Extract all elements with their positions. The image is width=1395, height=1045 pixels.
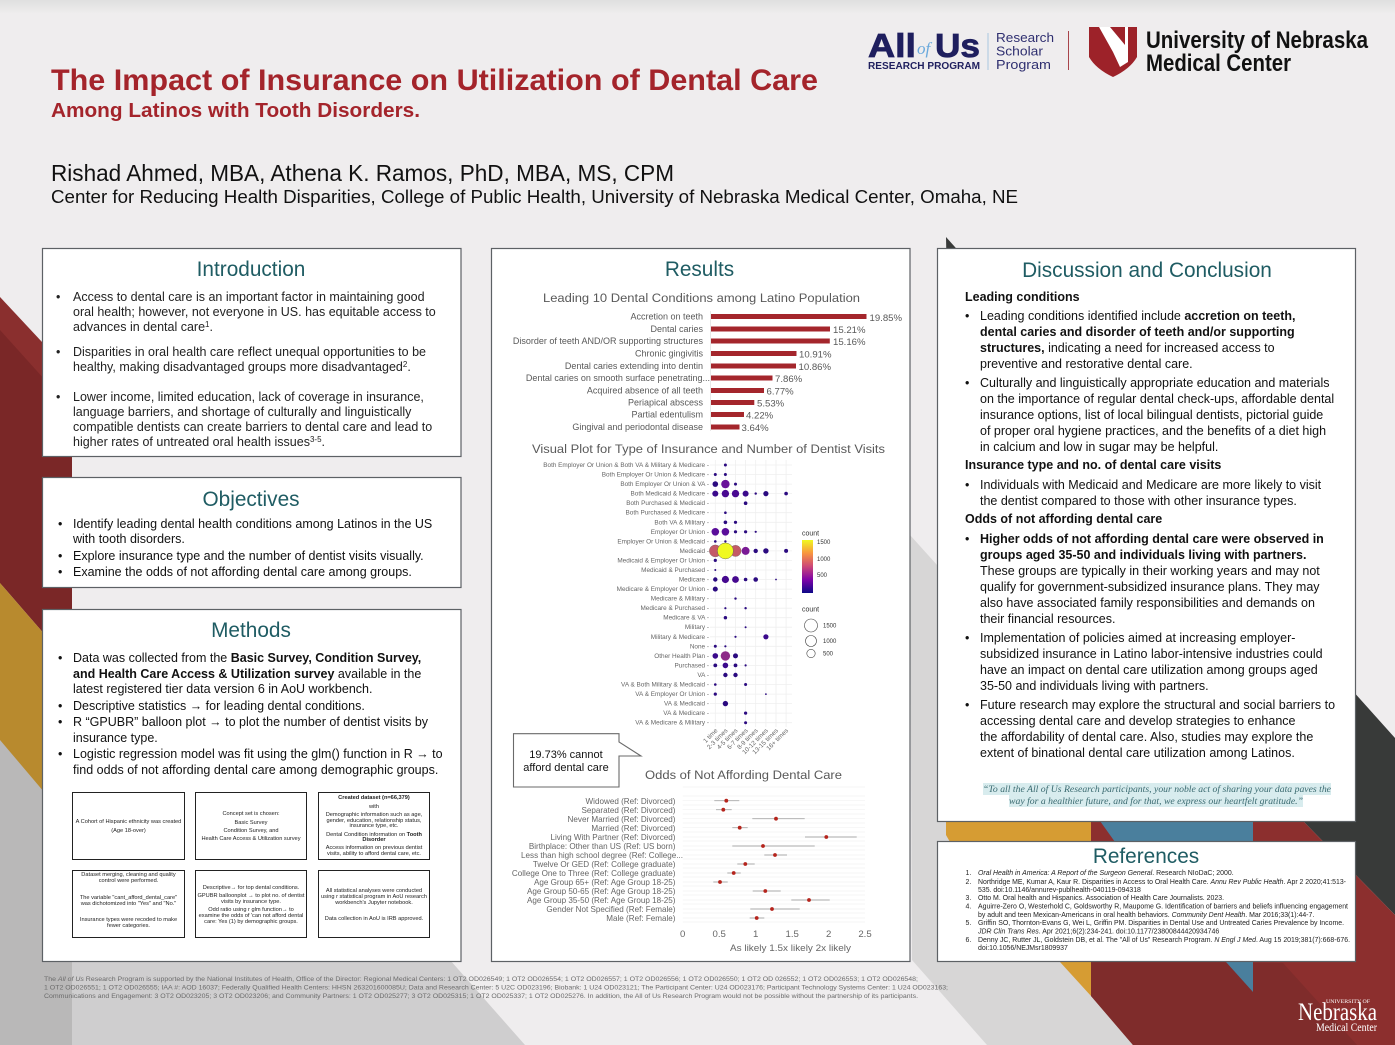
introduction text: . xyxy=(407,360,411,374)
flow box: analysis: Descriptive→ for top dental conditions. xyxy=(203,885,300,891)
discussion text: of proper oral hygiene practices, and the benefits of a diet high xyxy=(980,424,1326,438)
bar chart: leading dental conditions: 6.77% xyxy=(766,386,794,398)
introduction text: • xyxy=(56,290,60,304)
legend: size scale: count xyxy=(802,606,819,614)
discussion text: in calcium and low in sugar may be helpful. xyxy=(980,440,1218,454)
title: The Impact of Insurance on Utilization of Dental Care xyxy=(51,64,818,97)
acknowledgement quote xyxy=(983,783,1331,807)
introduction text: 2 xyxy=(403,360,408,369)
flow box: concept set: Basic Survey xyxy=(235,820,268,826)
methods text: R “GPUBR” balloon plot → to plot the number of dentist visits by xyxy=(73,715,429,729)
acknowledgement quote: “To all the All of Us Research participants, your noble act of sharing your data paves the xyxy=(983,784,1331,795)
flow box: created dataset: Created dataset (n=66,379) xyxy=(338,795,410,801)
reference list: 535. doi:10.1146/annurev-publhealth-040119-094318 xyxy=(978,887,1141,894)
flow box: statistical program: All statistical analyses were conducted xyxy=(326,888,422,894)
introduction text: Disparities in oral health care reflect unequal opportunities to be xyxy=(73,345,426,359)
balloon plot: insurance type by dentist visits xyxy=(543,460,792,756)
flow box: concept set: Health Care Access & Utilization survey xyxy=(201,836,301,842)
balloon plot: insurance type by dentist visits: Purchased - xyxy=(675,662,709,669)
methods text: find odds of not affording dental care among demographic groups. xyxy=(73,763,438,777)
bar chart: leading dental conditions: 10.86% xyxy=(798,362,832,373)
discussion text: on the importance of regular dental check-ups, affordable dental xyxy=(980,392,1334,406)
heading: introduction: Introduction xyxy=(197,258,305,281)
discussion text xyxy=(965,290,1335,760)
funding acknowledgement: 1 OT2 OD026551; 1 OT2 OD026555; IAA #: AOD 16037; Federally Qualified Health Centers: HHSN 263201600085U; Data and Research Center: 5 U2C OD023196; Biobank: 1 U24 OD023121; The Participant Center: U24 OD023176; Participant Technology Systems Center: 1 U24 OD023163; xyxy=(44,984,948,992)
flow box: created dataset: with xyxy=(368,804,379,810)
reference list: 3. xyxy=(966,895,971,902)
bar chart: leading dental conditions: Periapical abscess xyxy=(628,398,703,408)
panel: introduction xyxy=(42,248,461,456)
forest plot: odds of not affording dental care: Never Married (Ref: Divorced) xyxy=(568,815,676,824)
logo text: Research Scholar Program: Research xyxy=(996,30,1054,45)
discussion text: • xyxy=(965,309,969,323)
flow box: merging and cleaning: Dataset merging, cleaning and quality xyxy=(81,872,176,878)
logo: All of Us: Us xyxy=(935,27,980,64)
heading: methods: Methods xyxy=(211,619,291,642)
discussion text: also have associated family responsibilities and demands on xyxy=(980,596,1315,610)
flow box: analysis xyxy=(196,870,306,938)
heading: objectives: Objectives xyxy=(202,488,300,511)
flow box: created dataset: visits, ability to afford dental care, etc. xyxy=(327,851,421,857)
introduction text: 3-5 xyxy=(310,435,322,444)
balloon plot: insurance type by dentist visits: Military & Medicare - xyxy=(651,634,709,641)
bar chart: leading dental conditions: Acquired absence of all teeth xyxy=(587,386,703,396)
forest plot: odds of not affording dental care: 1.5 xyxy=(786,929,799,940)
flow box: statistical program xyxy=(318,870,430,938)
reference list: 2. xyxy=(966,879,971,886)
flow box: merging and cleaning: control were performed. xyxy=(99,878,159,884)
discussion text: Culturally and linguistically appropriate education and materials xyxy=(980,376,1330,390)
panel: references xyxy=(938,842,1356,962)
bar chart: leading dental conditions: Accretion on teeth xyxy=(630,312,703,322)
discussion text: structures, indicating a need for increased access to xyxy=(980,341,1275,355)
flow box: cohort: A Cohort of Hispanic ethnicity was created xyxy=(76,819,181,825)
forest plot: odds of not affording dental care: 0 xyxy=(680,929,685,940)
forest plot: odds of not affording dental care: Age Group 50-65 (Ref: Age Group 18-25) xyxy=(527,887,676,896)
forest plot: odds of not affording dental care: Married (Ref: Divorced) xyxy=(591,824,676,833)
bar chart: leading dental conditions: 5.53% xyxy=(757,398,785,410)
balloon plot: insurance type by dentist visits: 8-9 times xyxy=(736,727,760,751)
bar chart: leading dental conditions: 4.22% xyxy=(746,410,774,422)
balloon plot: insurance type by dentist visits: Both Employer Or Union & VA - xyxy=(620,481,709,488)
reference list: 1. xyxy=(966,870,971,877)
discussion text: Future research may explore the structural and social barriers to xyxy=(980,698,1335,712)
discussion text: • xyxy=(965,478,969,492)
balloon plot: insurance type by dentist visits: Both Purchased & Medicaid - xyxy=(626,500,709,507)
introduction text: . xyxy=(322,435,325,449)
forest plot: odds of not affording dental care: Living With Partner (Ref: Divorced) xyxy=(550,833,676,842)
header logos xyxy=(868,27,1369,77)
introduction text xyxy=(56,290,436,449)
discussion text: dental caries and disorder of teeth and/or supporting xyxy=(980,325,1295,339)
bar chart: leading dental conditions: 7.86% xyxy=(775,374,803,385)
introduction text: • xyxy=(56,390,60,404)
introduction text: . xyxy=(209,320,213,334)
balloon plot: insurance type by dentist visits: 13-15 times xyxy=(751,727,780,756)
forest plot: odds of not affording dental care: College One to Three (Ref: College graduate) xyxy=(512,869,676,878)
discussion text: Individuals with Medicaid and Medicare are more likely to visit xyxy=(980,478,1322,492)
authors: Rishad Ahmed, MBA, Athena K. Ramos, PhD, MBA, MS, CPM xyxy=(51,160,674,186)
flow box: cohort xyxy=(72,792,184,860)
logo: Nebraska Medical Center xyxy=(1298,999,1377,1034)
balloon plot: insurance type by dentist visits: Both Employer Or Union & Both VA & Military & Medicare - xyxy=(543,462,709,469)
legend: colour scale xyxy=(802,530,831,593)
reference list: by adult and teen Mexican-Americans in oral health behaviors. Community Dent Health. Mar 2016;33(1):44-7. xyxy=(978,912,1314,919)
logo: All of Us: All xyxy=(868,27,916,64)
objectives text: with tooth disorders. xyxy=(72,532,185,546)
logo text: Research Scholar Program xyxy=(996,30,1054,72)
flow box: analysis: visits by insurance type. xyxy=(221,899,281,905)
forest plot: odds of not affording dental care: Widowed (Ref: Divorced) xyxy=(586,797,676,806)
discussion text: 35-50 and individuals living with partners. xyxy=(980,679,1209,693)
discussion text: the dentist compared to those with other insurance types. xyxy=(980,494,1297,508)
flow box: statistical program: using r statistical program in AoU research xyxy=(321,894,427,900)
objectives text: • xyxy=(58,549,62,563)
balloon plot: insurance type by dentist visits: Medicare & Employer Or Union - xyxy=(617,586,709,593)
discussion text: subsidized insurance in Latino labor-intensive industries could xyxy=(980,647,1323,661)
reference list: JDR Clin Trans Res. Apr 2021;6(2):234-241. doi:10.1177/23800844420934746 xyxy=(977,928,1219,936)
forest plot: odds of not affording dental care: 2.5 xyxy=(858,929,872,940)
balloon plot: insurance type by dentist visits: VA & Medicare & Military - xyxy=(635,720,709,727)
methods text: Logistic regression model was fit using the glm() function in R → to xyxy=(73,747,443,761)
methods text: Descriptive statistics → for leading dental conditions. xyxy=(73,699,365,713)
methods text: and Health Care Access & Utilization survey available in the xyxy=(73,667,421,681)
panel: discussion and conclusion xyxy=(938,248,1356,822)
flow box: created dataset: insurance type, etc. xyxy=(350,823,399,829)
forest plot: odds of not affording dental care: Gender Not Specified (Ref: Female) xyxy=(546,905,676,914)
discussion text: • xyxy=(965,631,969,645)
forest plot: odds of not affording dental care: Male (Ref: Female) xyxy=(606,914,676,923)
flow box: cohort: (Age 18-over) xyxy=(111,828,146,834)
methods text: insurance type. xyxy=(73,731,158,745)
discussion text: their financial resources. xyxy=(980,612,1115,626)
balloon plot: insurance type by dentist visits: 16+ times xyxy=(765,727,790,752)
panel: methods xyxy=(42,610,461,962)
introduction text: • xyxy=(56,345,60,359)
balloon plot: insurance type by dentist visits: VA & Medicaid - xyxy=(664,701,709,708)
forest plot: odds of not affording dental care: Age Group 35-50 (Ref: Age Group 18-25) xyxy=(527,896,676,905)
panel: results xyxy=(492,248,910,962)
forest plot: odds of not affording dental care: Age Group 65+ (Ref: Age Group 18-25) xyxy=(534,878,676,887)
discussion text: groups aged 35-50 and individuals living with partners. xyxy=(980,548,1306,562)
reference list: Oral Health in America: A Report of the Surgeon General. Research NIoDaC; 2000. xyxy=(978,870,1234,877)
discussion text: Insurance type and no. of dental care visits xyxy=(965,458,1221,472)
forest plot: odds of not affording dental care: 2 xyxy=(826,929,831,940)
chart title: odds: Odds of Not Affording Dental Care xyxy=(645,768,842,782)
discussion text: • xyxy=(965,698,969,712)
flow box: created dataset: Dental Condition information on Tooth xyxy=(326,832,422,838)
legend: colour scale: count xyxy=(802,530,819,538)
discussion text: extent of binational dental care utilization among Latinos. xyxy=(980,746,1295,760)
bar chart: leading dental conditions: 19.85% xyxy=(870,313,903,324)
flow box: merging and cleaning xyxy=(72,870,184,938)
logo: Nebraska Medical Center: UNIVERSITY OF xyxy=(1326,1000,1370,1005)
discussion text: Higher odds of not affording dental care were observed in xyxy=(980,532,1324,546)
balloon plot: insurance type by dentist visits: Both Medicaid & Medicare - xyxy=(630,491,709,498)
heading: discussion and conclusion: Discussion and Conclusion xyxy=(1022,259,1272,282)
discussion text: accessing dental care and develop strategies to enhance xyxy=(980,714,1296,728)
objectives text: Explore insurance type and the number of dentist visits visually. xyxy=(73,549,424,563)
bar chart: leading dental conditions: Chronic gingivitis xyxy=(635,348,703,358)
discussion text: insurance options, list of local bilingual dentists, pictorial guide xyxy=(980,408,1323,422)
methods text: • xyxy=(58,747,62,761)
bar chart: leading dental conditions: Gingival and periodontal disease xyxy=(572,422,703,432)
bar chart: leading dental conditions: 15.21% xyxy=(833,325,866,336)
legend: colour scale: 500 xyxy=(817,573,828,579)
forest plot: odds of not affording dental care: Separated (Ref: Divorced) xyxy=(581,806,676,815)
forest plot: odds of not affording dental care: Birthplace: Other than US (Ref: US born) xyxy=(529,842,676,851)
legend: size scale: 1500 xyxy=(823,624,837,630)
flow box: created dataset: gender, education, relationship status, xyxy=(326,818,422,824)
balloon plot: insurance type by dentist visits: Medicare & VA - xyxy=(663,615,709,622)
flow box: analysis: Odd ratio using r glm function→ to xyxy=(208,907,294,913)
forest plot: odds of not affording dental care: 1 xyxy=(753,929,758,940)
balloon plot: insurance type by dentist visits: Employer Or Union & Medicaid - xyxy=(617,538,709,545)
methods text: • xyxy=(58,699,62,713)
flow box: analysis: care: Yes (1) by demographic groups. xyxy=(204,919,298,925)
introduction text: advances in dental care xyxy=(73,320,205,334)
flow box: created dataset: Demographic information such as age, xyxy=(326,812,423,818)
flow box: statistical program: workbench's Jupyter notebook. xyxy=(334,900,413,906)
heading: results: Results xyxy=(665,258,734,281)
introduction text: language barriers, and shortage of culturally and linguistically xyxy=(73,405,412,419)
flow box: merging and cleaning: fewer categories. xyxy=(107,923,150,929)
objectives text: Examine the odds of not affording dental care among groups. xyxy=(73,565,412,579)
flow box: merging and cleaning: The variable "cant_afford_dental_care" xyxy=(80,895,177,901)
balloon plot: insurance type by dentist visits: 10-12 times xyxy=(741,727,770,756)
discussion text: have an impact on dental care utilization among groups aged xyxy=(980,663,1318,677)
balloon plot: insurance type by dentist visits: 2-3 times xyxy=(706,727,729,751)
discussion text: Leading conditions identified include accretion on teeth, xyxy=(980,309,1295,323)
introduction text: 1 xyxy=(205,320,210,329)
introduction text: oral health; however, not everyone in US. has equitable access to xyxy=(73,305,436,319)
reference list: 6. xyxy=(966,937,971,944)
balloon plot: insurance type by dentist visits: Both Employer Or Union & Medicare - xyxy=(602,472,709,478)
funding acknowledgement: Communications and Engagement: 3 OT2 OD023205; 3 OT2 OD023206; and Community Partners: 1 OT2 OD025277; 3 OT2 OD025315; 1 OT2 OD025337; 1 OT2 OD025276. In addition, the All of Us Research Program would not be possible without the partnership of its participants. xyxy=(44,993,918,1000)
affiliation: Center for Reducing Health Disparities, College of Public Health, University of Nebraska Medical Center, Omaha, NE xyxy=(51,186,1018,207)
balloon plot: insurance type by dentist visits: Medicare & Military - xyxy=(651,596,709,603)
subtitle: Among Latinos with Tooth Disorders. xyxy=(51,99,420,122)
discussion text: These groups are typically in their working years and may not xyxy=(980,564,1320,578)
logo text: University of Nebraska Medical Center: Medical Center xyxy=(1146,50,1291,77)
legend: colour scale: 1000 xyxy=(817,557,831,563)
bar chart: leading dental conditions: Partial edentulism xyxy=(631,410,703,420)
logo: Nebraska Medical Center: Nebraska xyxy=(1298,999,1377,1026)
balloon plot: insurance type by dentist visits: 1 time xyxy=(702,727,720,745)
discussion text: qualify for government-subsidized insurance plans. They may xyxy=(980,580,1320,594)
balloon plot: insurance type by dentist visits: Medicaid - xyxy=(680,548,709,555)
funding acknowledgement xyxy=(44,976,948,1000)
flow box: created dataset: Disorder xyxy=(362,837,386,843)
introduction text: Lower income, limited education, lack of coverage in insurance, xyxy=(73,390,424,404)
reference list: Aguirre-Zero O, Westerhold C, Goldsworthy R, Maupome G. Identification of barriers and beliefs influencing engagement xyxy=(978,904,1348,910)
discussion text: • xyxy=(965,532,969,546)
flow box: concept set: Concept set is chosen: xyxy=(222,811,280,817)
balloon plot: insurance type by dentist visits: Medicare - xyxy=(679,576,709,584)
bar chart: leading dental conditions: Dental caries on smooth surface penetrating... xyxy=(526,373,710,383)
flow box: statistical program: Data collection in AoU is IRB approved. xyxy=(325,916,424,922)
logo text: University of Nebraska Medical Center xyxy=(1146,27,1369,77)
objectives text: Identify leading dental health conditions among Latinos in the US xyxy=(73,517,432,531)
callout: 19.73% cannot afford xyxy=(514,734,641,787)
reference list: Griffin SO, Thornton-Evans G, Wei L, Griffin PM. Disparities in Dental Use and Untreated Caries Prevalence by Income. xyxy=(978,920,1344,927)
heading: references: References xyxy=(1093,845,1199,868)
balloon plot: insurance type by dentist visits: Medicaid & Employer Or Union - xyxy=(617,557,709,564)
chart title: balloon plot: Visual Plot for Type of Insurance and Number of Dentist Visits xyxy=(532,442,885,456)
forest plot: odds of not affording dental care: Less than high school degree (Ref: College... xyxy=(521,851,683,860)
balloon plot: insurance type by dentist visits: Both VA & Military - xyxy=(654,519,709,526)
bar chart: leading dental conditions: Dental caries xyxy=(650,324,703,334)
panel: objectives xyxy=(42,478,461,588)
discussion text: Odds of not affording dental care xyxy=(965,512,1162,526)
methods text: • xyxy=(58,715,62,729)
balloon plot: insurance type by dentist visits: Employer Or Union - xyxy=(651,529,709,536)
objectives text: • xyxy=(58,517,62,531)
flow box: merging and cleaning: was dichotomized into "Yes" and "No." xyxy=(80,901,176,907)
balloon plot: insurance type by dentist visits: Other Health Plan - xyxy=(654,653,709,660)
flow box: created dataset: Access information on previous dentist xyxy=(326,845,423,851)
flow box: analysis: examine the odds of 'can not afford dental xyxy=(199,913,303,919)
methods text: Data was collected from the Basic Survey, Condition Survey, xyxy=(73,651,421,665)
logo: All of Us xyxy=(868,27,980,72)
legend: colour scale: 1500 xyxy=(817,540,831,546)
flow box: analysis: GPUBR balloonplot → to plot no. of dentist xyxy=(198,893,305,899)
logo text: Research Scholar Program: Scholar xyxy=(996,44,1044,58)
discussion text: preventive and restorative dental care. xyxy=(980,357,1193,371)
forest plot: odds of not affording dental care: Twelve Or GED (Ref: College graduate) xyxy=(533,860,676,869)
legend: size scale: 500 xyxy=(823,652,834,658)
balloon plot: insurance type by dentist visits: VA & Medicare - xyxy=(663,710,709,717)
objectives text xyxy=(58,517,432,579)
callout: 19.73% cannot afford: afford dental care xyxy=(523,762,609,774)
discussion text: • xyxy=(965,376,969,390)
logo: UNMC shield xyxy=(1089,27,1137,77)
balloon plot: insurance type by dentist visits: VA & Employer Or Union - xyxy=(635,691,709,698)
discussion text: Implementation of policies aimed at increasing employer- xyxy=(980,631,1295,645)
forest plot: odds of not affording dental care: 0.5 xyxy=(713,929,726,940)
reference list: Northridge ME, Kumar A, Kaur R. Disparities in Access to Oral Health Care. Annu Rev Public Health. Apr 2 2020;41:513- xyxy=(978,879,1346,886)
balloon plot: insurance type by dentist visits: 4-5 times xyxy=(716,727,739,751)
introduction text: healthy, making disadvantaged groups more disadvantaged xyxy=(73,360,403,374)
introduction text: higher rates of untreated oral health issues xyxy=(73,435,310,449)
balloon plot: insurance type by dentist visits: Military - xyxy=(685,624,709,631)
bar chart: leading dental conditions: Dental caries extending into dentin xyxy=(565,361,703,371)
bar chart: leading dental conditions: Disorder of teeth AND/OR supporting structures xyxy=(513,336,703,346)
logo: Nebraska Medical Center: Medical Center xyxy=(1316,1020,1377,1034)
flow box: concept set xyxy=(196,792,306,860)
bar chart: leading dental conditions: 15.16% xyxy=(833,337,866,348)
logo text: Research Scholar Program: Program xyxy=(996,57,1051,72)
discussion text: Leading conditions xyxy=(965,290,1080,304)
methods text xyxy=(58,651,443,777)
methods text: • xyxy=(58,651,62,665)
bar chart: leading dental conditions: 10.91% xyxy=(799,350,832,360)
acknowledgement quote: way for a healthier future, and for that, we express our heartfelt gratitude.” xyxy=(1009,796,1303,807)
logo: All of Us: RESEARCH PROGRAM xyxy=(868,61,980,72)
methods text: latest registered tier data version 6 in AoU workbench. xyxy=(73,682,372,696)
bar chart: leading dental conditions: 3.64% xyxy=(742,423,769,434)
chart title: leading conditions: Leading 10 Dental Conditions among Latino Population xyxy=(543,291,860,305)
reference list: doi:10.1056/NEJMsr1809937 xyxy=(978,945,1068,952)
balloon plot: insurance type by dentist visits: Medicare & Purchased - xyxy=(640,605,709,612)
flow box: merging and cleaning: Insurance types were recoded to make xyxy=(80,917,177,923)
introduction text: compatible dentists can create barriers to dental care and lead to xyxy=(73,420,432,434)
forest plot: odds of not affording dental care xyxy=(512,787,872,953)
callout: 19.73% cannot afford: 19.73% cannot xyxy=(529,749,603,761)
reference list: Otto M. Oral health and Hispanics. Association of Health Care Journalists. 2023. xyxy=(978,895,1224,902)
forest plot: odds of not affording dental care: As likely 1.5x likely 2x likely xyxy=(730,943,851,953)
introduction text: Access to dental care is an important factor in maintaining good xyxy=(73,290,425,304)
bar chart: leading dental conditions xyxy=(513,311,903,434)
reference list: Denny JC, Rutter JL, Goldstein DB, et al. The "All of Us" Research Program. N Engl J Med. Aug 15 2019;381(7):668-676. xyxy=(978,937,1350,944)
logo: All of Us: of xyxy=(917,39,932,58)
legend: size scale xyxy=(802,606,837,658)
reference list: 5. xyxy=(966,920,971,927)
funding acknowledgement: The All of Us Research Program is supported by the National Institutes of Health, Office of the Director: Regional Medical Centers: 1 OT2 OD026549; 1 OT2 OD026554; 1 OT2 OD026557; 1 OT2 OD026556; 1 OT2 OD026550; 1 OT2 OD 026552; 1 OT2 OD026553; 1 OT2 OD026548; xyxy=(44,976,918,983)
balloon plot: insurance type by dentist visits: VA & Both Military & Medicaid - xyxy=(621,682,709,688)
reference list: 4. xyxy=(966,904,971,910)
balloon plot: insurance type by dentist visits: VA - xyxy=(697,672,709,679)
flow box: created dataset xyxy=(318,792,430,860)
balloon plot: insurance type by dentist visits: 6-7 times xyxy=(726,727,750,751)
flow box: concept set: Condition Survey, and xyxy=(223,828,279,834)
reference list xyxy=(966,870,1350,952)
balloon plot: insurance type by dentist visits: Medicaid & Purchased - xyxy=(641,567,709,574)
balloon plot: insurance type by dentist visits: Both Purchased & Medicare - xyxy=(626,510,709,517)
balloon plot: insurance type by dentist visits: None - xyxy=(690,643,709,650)
discussion text: the affordability of dental care. Also, studies may explore the xyxy=(980,730,1313,744)
objectives text: • xyxy=(58,565,62,579)
legend: size scale: 1000 xyxy=(823,639,837,645)
